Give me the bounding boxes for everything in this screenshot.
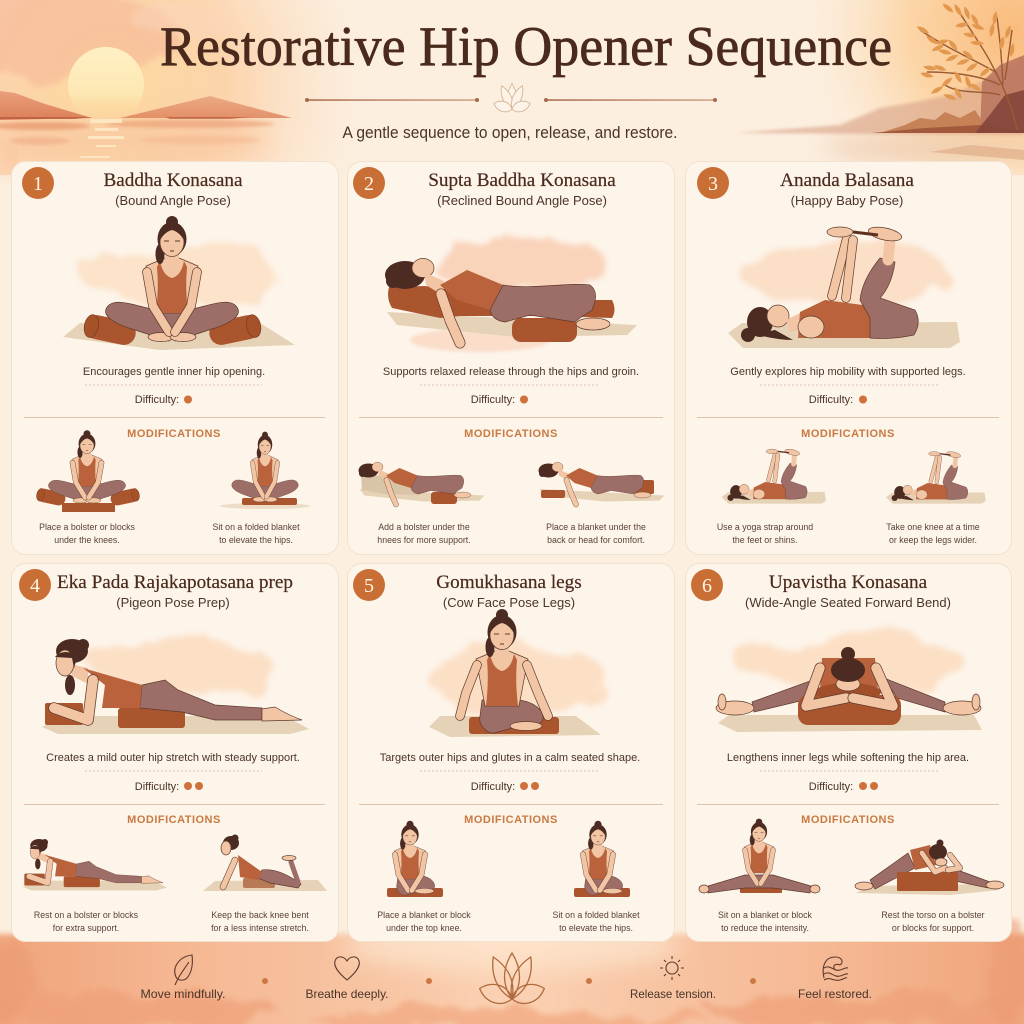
difficulty: Difficulty: — [809, 394, 853, 406]
step number — [697, 167, 729, 199]
english name: (Reclined Bound Angle Pose) — [437, 193, 607, 208]
footer: feel restored — [798, 957, 872, 1001]
modification 2: Place a blanket under the — [546, 522, 646, 532]
title: Restorative Hip Opener Sequence — [160, 16, 892, 78]
panel 6 — [686, 564, 1012, 942]
footer separator dot — [262, 978, 268, 984]
modification 2: to elevate the hips. — [219, 535, 293, 545]
modification 2: or keep the legs wider. — [889, 535, 977, 545]
modification 1 — [699, 819, 820, 933]
benefit: Creates a mild outer hip stretch with steady support. — [46, 752, 300, 764]
modification 2: back or head for comfort. — [547, 535, 645, 545]
modification 1: Add a bolster under the — [378, 522, 470, 532]
illustration: wide angle forward bend — [716, 632, 982, 732]
difficulty: Difficulty: — [471, 394, 515, 406]
pose name: Eka Pada Rajakapotasana prep — [57, 572, 293, 593]
pose name: Supta Baddha Konasana — [428, 170, 616, 191]
pose name: Gomukhasana legs — [436, 572, 582, 593]
modification 2: or blocks for support. — [892, 923, 974, 933]
modifications heading: MODIFICATIONS — [801, 814, 895, 826]
footer: breathe deeply: Breathe deeply. — [306, 987, 388, 1001]
modification 1 — [23, 839, 167, 933]
benefit: Encourages gentle inner hip opening. — [83, 366, 265, 378]
modification 2: Sit on a folded blanket — [212, 522, 300, 532]
footer: release tension — [630, 956, 716, 1001]
modification 1 — [377, 821, 471, 933]
modification 2: Sit on a folded blanket — [552, 910, 640, 920]
modification 2: Keep the back knee bent — [211, 910, 309, 920]
benefit: Targets outer hips and glutes in a calm seated shape. — [380, 752, 640, 764]
difficulty — [135, 781, 203, 793]
benefit: Lengthens inner legs while softening the hip area. — [727, 752, 969, 764]
modification 1: for extra support. — [53, 923, 119, 933]
illustration: bound angle — [63, 216, 295, 350]
footer separator dot — [426, 978, 432, 984]
footer separator dot — [586, 978, 592, 984]
footer lotus — [477, 953, 547, 1008]
modification 2: Take one knee at a time — [886, 522, 980, 532]
illustration: cow face legs — [428, 609, 608, 737]
footer: move mindfully: Move mindfully. — [140, 987, 226, 1001]
panel 4 — [12, 564, 338, 942]
difficulty — [471, 781, 539, 793]
footer: breathe deeply — [306, 957, 388, 1001]
english name: (Happy Baby Pose) — [791, 193, 903, 208]
difficulty: Difficulty: — [135, 781, 179, 793]
modification 2 — [212, 432, 310, 545]
modification 1: Rest on a bolster or blocks — [34, 910, 139, 920]
modification 2: for a less intense stretch. — [211, 923, 309, 933]
modification 1: under the top knee. — [386, 923, 462, 933]
illustration: pigeon — [42, 637, 309, 734]
modification 1: to reduce the intensity. — [721, 923, 809, 933]
modification 2 — [886, 451, 986, 545]
step number: 2 — [364, 173, 374, 195]
step number: 5 — [364, 575, 374, 597]
step number — [353, 167, 385, 199]
step number: 3 — [708, 173, 718, 195]
panel 5 — [348, 564, 674, 942]
footer band — [0, 919, 1024, 1024]
footer: move mindfully — [140, 955, 226, 1001]
benefit: Supports relaxed release through the hips and groin. — [383, 366, 639, 378]
watercolor lakeside tree scene — [735, 0, 1024, 175]
subtitle: A gentle sequence to open, release, and restore. — [342, 124, 678, 142]
modification 2 — [203, 834, 327, 933]
modification 2 — [552, 821, 640, 933]
modifications heading: MODIFICATIONS — [464, 428, 558, 440]
watercolor sunset scene — [0, 0, 370, 175]
modifications heading: MODIFICATIONS — [127, 428, 221, 440]
illustration: reclined bound angle — [385, 232, 637, 352]
modification 1: Sit on a blanket or block — [718, 910, 813, 920]
panel 1 — [12, 162, 338, 554]
modification 2: to elevate the hips. — [559, 923, 633, 933]
english name: (Wide-Angle Seated Forward Bend) — [745, 595, 951, 610]
modification 1: under the knees. — [54, 535, 120, 545]
illustration: happy baby — [728, 225, 960, 348]
english name: (Cow Face Pose Legs) — [443, 595, 575, 610]
panel 3 — [686, 162, 1012, 554]
difficulty: Difficulty: — [809, 781, 853, 793]
step number: 4 — [30, 575, 40, 597]
pose name: Baddha Konasana — [103, 170, 243, 191]
modification 1: Place a blanket or block — [377, 910, 471, 920]
benefit: Gently explores hip mobility with supported legs. — [730, 366, 966, 378]
english name: (Pigeon Pose Prep) — [116, 595, 230, 610]
english name: (Bound Angle Pose) — [115, 193, 231, 208]
step number — [22, 167, 54, 199]
modifications heading: MODIFICATIONS — [127, 814, 221, 826]
step number: 1 — [33, 173, 43, 195]
modifications heading: MODIFICATIONS — [464, 814, 558, 826]
modification 1 — [717, 448, 826, 545]
difficulty: Difficulty: — [135, 394, 179, 406]
step number — [691, 569, 723, 601]
modifications heading: MODIFICATIONS — [801, 428, 895, 440]
modification 1: Place a bolster or blocks — [39, 522, 136, 532]
modification 1: hnees for more support. — [377, 535, 471, 545]
footer: feel restored: Feel restored. — [798, 987, 872, 1001]
footer: release tension: Release tension. — [630, 987, 716, 1001]
panel 2 — [348, 162, 674, 554]
step number — [353, 569, 385, 601]
step number — [19, 569, 51, 601]
modification 1: the feet or shins. — [732, 535, 798, 545]
difficulty — [809, 781, 878, 793]
modification 2 — [855, 840, 1004, 933]
modification 2 — [538, 462, 664, 545]
title ornament — [305, 84, 717, 114]
modification 1 — [35, 430, 141, 545]
footer separator dot — [750, 978, 756, 984]
modification 1: Use a yoga strap around — [717, 522, 813, 532]
pose name: Ananda Balasana — [780, 170, 914, 191]
pose name: Upavistha Konasana — [769, 572, 928, 593]
difficulty: Difficulty: — [471, 781, 515, 793]
step number: 6 — [702, 575, 712, 597]
modification 1 — [358, 462, 484, 545]
modification 2: Rest the torso on a bolster — [881, 910, 985, 920]
